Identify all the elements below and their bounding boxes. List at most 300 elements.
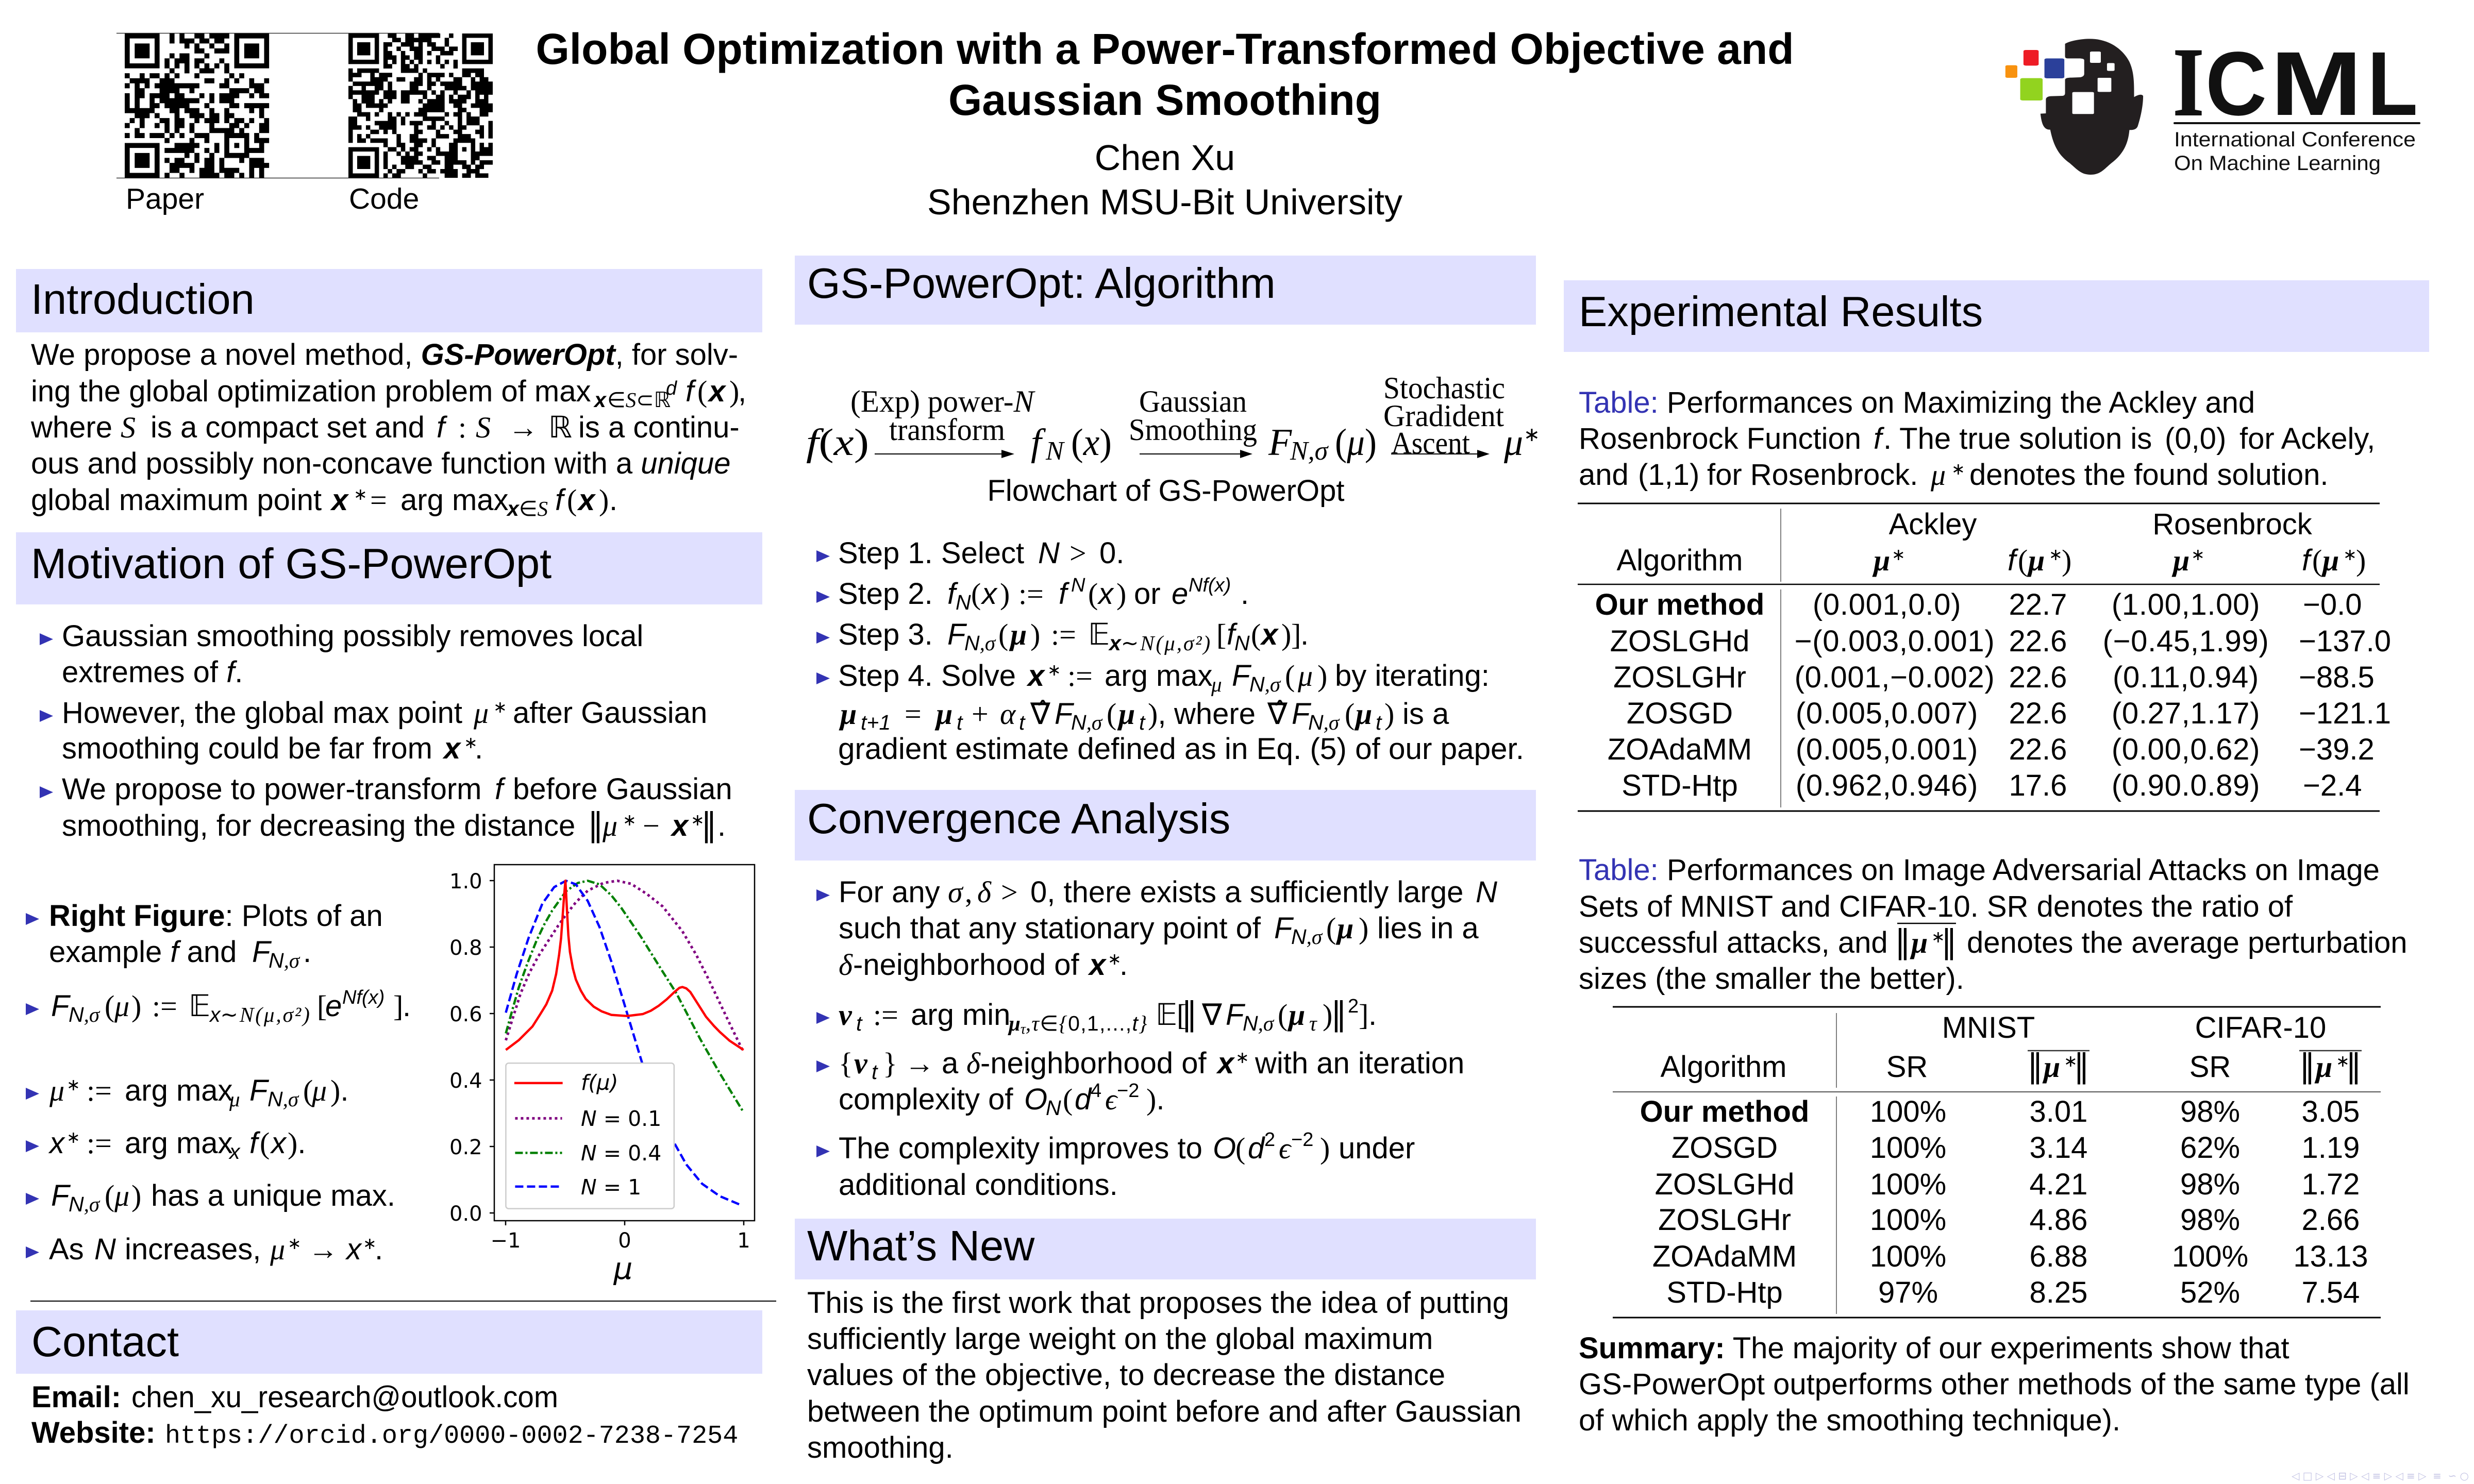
logo tagline: International Conference <box>2174 128 2416 151</box>
flowchart: N <box>1045 436 1065 466</box>
bullet list: motivation points: after Gaussian <box>513 696 707 730</box>
bullet list: right figure notes: . <box>303 935 311 969</box>
table 2: MNIST and CIFAR-10: ZOSGD <box>1671 1131 1778 1165</box>
caption: table 2: denotes the average perturbation <box>1967 926 2408 959</box>
bullet list: convergence results: For any <box>839 875 940 909</box>
table 2: MNIST and CIFAR-10: ‖ <box>2027 1047 2043 1085</box>
bullet list: right figure notes: f <box>249 1126 261 1160</box>
bullet list: algorithm steps: F <box>1055 697 1075 731</box>
text block: summary: of which apply the smoothing technique). <box>1579 1404 2120 1437</box>
bullet list: convergence results: O <box>1213 1132 1236 1165</box>
table 2: MNIST and CIFAR-10: SR <box>2189 1050 2231 1084</box>
bullet list: convergence results: ϵ <box>1279 1132 1292 1165</box>
bullet list: algorithm steps: Step 3. <box>838 618 933 651</box>
bullet list: algorithm steps: μ <box>1211 672 1222 696</box>
table 2: MNIST and CIFAR-10: 97% <box>1878 1276 1938 1309</box>
flowchart: Smoothing <box>1129 413 1257 447</box>
flowchart: ∗ <box>1524 423 1540 446</box>
legend labels <box>581 1070 661 1200</box>
bullet list: algorithm steps: . <box>1300 618 1309 651</box>
heading: Experimental Results <box>1564 280 2429 352</box>
bullet list: right figure notes: increases, <box>125 1233 261 1266</box>
bullet list: algorithm steps: ,σ <box>1265 672 1281 696</box>
heading: Motivation: Motivation of GS-PowerOpt <box>31 539 551 587</box>
table 1: Ackley and Rosenbrock: μ <box>1872 544 1890 577</box>
heading: Contact <box>16 1310 762 1374</box>
bullet list: motivation points <box>40 619 732 844</box>
bullet list: algorithm steps: F <box>947 618 967 651</box>
y axis labels: 1.0 <box>449 870 482 893</box>
text block: introduction body: S <box>121 411 136 444</box>
panel: experimental results <box>1564 280 2429 1437</box>
table 1: Ackley and Rosenbrock: −121.1 <box>2299 697 2391 730</box>
bullet list: algorithm steps: t+1 <box>861 711 891 734</box>
table 1: Ackley and Rosenbrock: −2.4 <box>2303 769 2362 802</box>
caption: table 1: ∗ <box>1951 459 1965 479</box>
bullet list: convergence results: d <box>1248 1132 1265 1165</box>
table 2: MNIST and CIFAR-10: 100% <box>1870 1095 1946 1128</box>
caption: table 1 <box>1579 386 2375 492</box>
bullet list: convergence results: F <box>1274 912 1294 945</box>
bullet list: right figure notes: . <box>340 1074 348 1107</box>
table 1: Ackley and Rosenbrock: f <box>2008 544 2019 577</box>
bullet list: convergence results: ϵ <box>1105 1083 1118 1116</box>
x axis labels: −1 <box>491 1229 521 1253</box>
table 1: Ackley and Rosenbrock: 17.6 <box>2009 769 2067 802</box>
table 2: MNIST and CIFAR-10: μ <box>2042 1050 2060 1084</box>
icon: head with coloured pixels <box>2005 39 2143 175</box>
caption: table 1: f <box>1874 422 1885 456</box>
bullet list: convergence results: a <box>942 1047 959 1080</box>
bullet list: convergence results: := <box>873 998 898 1032</box>
table 1: Ackley and Rosenbrock: ∗ <box>2191 545 2205 564</box>
authors and affiliation <box>927 138 1402 222</box>
bullet list: right figure notes: ( <box>260 1126 270 1160</box>
table 1: Ackley and Rosenbrock: 22.6 <box>2009 625 2067 658</box>
logo: ICML <box>2005 28 2420 175</box>
bullet list: convergence results: complexity of <box>839 1083 1013 1116</box>
text block: introduction body: We propose a novel method, GS-PowerOpt, for solv- <box>31 338 738 372</box>
bullet list: right figure notes: μ <box>114 989 129 1023</box>
bullet list: algorithm steps: where <box>1174 697 1256 731</box>
text block: introduction body: ous and possibly non-concave function with a unique <box>31 447 730 480</box>
flowchart: Stochastic <box>1383 371 1505 405</box>
navigation symbols: ◁ □ ▷ ◁ ⊟ ▷ ◁ ≡ ▷ ◁ ≡ ▷ ≡ ∽ ○ <box>2291 1470 2469 1482</box>
bullet list: algorithm steps: ,σ <box>1324 711 1340 734</box>
bullet list: algorithm steps: μ <box>1117 697 1135 731</box>
bullet list: algorithm steps: t <box>1376 711 1382 734</box>
caption: table 1: denotes the found solution. <box>1969 458 2329 492</box>
bullet list: right figure notes: F <box>51 989 69 1023</box>
bullet list: right figure notes: [ <box>317 989 327 1023</box>
label: Code: Code <box>349 182 419 215</box>
bullet list: algorithm steps: := <box>1018 577 1044 611</box>
bullet list: convergence results: . <box>1156 1083 1164 1116</box>
table 2: MNIST and CIFAR-10: 100% <box>1870 1203 1946 1237</box>
bullet list: right figure notes: ) <box>131 989 141 1023</box>
bullet list: algorithm steps: Nf(x) <box>1189 575 1231 596</box>
bullet list: motivation points: smoothing, for decreasing the distance <box>62 809 575 842</box>
bullet list: convergence results: . <box>1368 998 1377 1032</box>
bullet list: right figure notes <box>26 899 411 1266</box>
bullet list: right figure notes: x <box>345 1233 362 1266</box>
bullet list: convergence results: ‖ <box>1181 995 1197 1033</box>
bullet list: convergence results: ‖ <box>1331 995 1347 1033</box>
bullet list: right figure notes: ( <box>303 1074 313 1107</box>
bullet list: motivation points: ∗ <box>691 810 705 830</box>
bullet list: convergence results: ) <box>1323 998 1332 1032</box>
bullet list: convergence results: ∗ <box>1108 949 1122 969</box>
panel: algorithm <box>795 256 1540 766</box>
bullet list: right figure notes: ∗ <box>288 1234 302 1253</box>
heading: GS-PowerOpt Algorithm <box>795 256 1536 325</box>
caption: table 1: μ <box>1930 458 1946 492</box>
bullet list: right figure notes: ,σ <box>84 1192 101 1216</box>
bullet list: algorithm steps: or <box>1134 577 1161 611</box>
table 1: Ackley and Rosenbrock: 22.6 <box>2009 733 2067 766</box>
table 1: Ackley and Rosenbrock: −88.5 <box>2299 661 2375 694</box>
arrow: gaussian smoothing <box>1140 450 1252 458</box>
text block: introduction body: is a compact set and <box>151 411 425 444</box>
bullet list: convergence results: under <box>1339 1132 1415 1165</box>
table 2: MNIST and CIFAR-10: 8.25 <box>2030 1276 2087 1309</box>
table 2: MNIST and CIFAR-10: 98% <box>2180 1095 2240 1128</box>
bullet list: algorithm steps: := <box>1067 659 1093 693</box>
text block: introduction body: ( <box>567 483 577 517</box>
bullet list: algorithm steps: e <box>1172 577 1188 611</box>
heading: What's New <box>795 1219 1536 1279</box>
bullet list: right figure notes: μ <box>270 1233 285 1266</box>
bullet list: algorithm steps: ,σ <box>980 631 996 655</box>
bullet list: convergence results: x <box>1216 1047 1235 1080</box>
bullet list: algorithm steps: F <box>1292 697 1312 731</box>
bullet list: algorithm steps: μ <box>1354 697 1372 731</box>
bullet list: convergence results: ν <box>854 1047 868 1080</box>
text block: introduction body: = <box>370 483 387 517</box>
heading: Motivation <box>16 532 762 604</box>
bullet list: right figure notes: e <box>325 989 342 1023</box>
bullet list: convergence results: N <box>1476 875 1497 909</box>
table 2: MNIST and CIFAR-10: 100% <box>1870 1168 1946 1201</box>
flowchart: (x) <box>1071 421 1112 464</box>
table 2: MNIST and CIFAR-10: STD-Htp <box>1666 1276 1783 1309</box>
bullet list: convergence results: ) <box>1146 1083 1156 1116</box>
bullet list: convergence results: 𝔼 <box>1156 998 1177 1032</box>
bullet list: right figure notes: Nf(x) <box>342 987 385 1008</box>
arrow: stochastic gradient ascent <box>1391 450 1490 458</box>
bullet list: algorithm steps: ) <box>1030 618 1040 651</box>
bullet list: algorithm steps: N <box>1308 711 1324 734</box>
table 1: Ackley and Rosenbrock: ∗ <box>2049 545 2063 564</box>
bullet list: right figure notes: → <box>308 1233 338 1266</box>
bullet list: algorithm steps: Step 4. Solve <box>838 659 1016 693</box>
text block: introduction body: x <box>707 375 727 408</box>
bullet list: right figure notes: N <box>69 1192 84 1216</box>
table 2: MNIST and CIFAR-10: MNIST <box>1942 1011 2035 1044</box>
panel: introduction <box>16 269 762 520</box>
table 2: MNIST and CIFAR-10: ZOAdaMM <box>1652 1240 1797 1273</box>
bullet list: motivation points: − <box>643 809 660 842</box>
text block: what's new body: values of the objective, to decrease the distance <box>807 1358 1445 1392</box>
text block: introduction body: f <box>686 375 697 408</box>
bullet list: algorithm steps: ( <box>1107 697 1116 731</box>
table 2: MNIST and CIFAR-10: 98% <box>2180 1168 2240 1201</box>
table 1: Ackley and Rosenbrock: −(0.003,0.001) <box>1795 625 1995 658</box>
table 1: Ackley and Rosenbrock: f <box>2302 544 2313 577</box>
bullet list: convergence results: −2 <box>1291 1129 1313 1151</box>
QR code: code <box>348 33 493 178</box>
legend labels: f(μ) <box>581 1070 618 1095</box>
bullet list: algorithm steps: ∇̂ <box>1267 697 1288 731</box>
bullet list: right figure notes: ,σ <box>84 1003 101 1026</box>
table 1: Ackley and Rosenbrock: −39.2 <box>2299 733 2375 766</box>
panel: convergence analysis <box>795 790 1536 1202</box>
caption: table 2 <box>1579 853 2408 996</box>
text block: introduction body: x <box>593 388 607 412</box>
bullet list: convergence results: 2 <box>1348 996 1359 1017</box>
bullet list: right figure notes: ) <box>288 1126 297 1160</box>
text block: introduction body: . <box>609 483 617 517</box>
bullet list: algorithm steps: arg max <box>1105 659 1213 693</box>
legend labels: N = 0.1 <box>581 1106 661 1131</box>
text block: introduction body: d <box>666 378 678 399</box>
bullet list: algorithm steps: + <box>972 697 989 731</box>
table 1: Ackley and Rosenbrock: (0.962,0.946) <box>1796 769 1978 802</box>
bullet list: right figure notes: μ <box>229 1087 240 1111</box>
table 1: Ackley and Rosenbrock: Ackley <box>1889 508 1977 541</box>
table 1: Ackley and Rosenbrock: Algorithm <box>1617 544 1743 577</box>
bullet list: convergence results: N <box>1046 1096 1061 1120</box>
line chart: f and F_N,sigma curves <box>449 865 755 1286</box>
table 2: MNIST and CIFAR-10: ZOSLGHr <box>1658 1203 1791 1237</box>
bullet list: right figure notes: . <box>297 1126 306 1160</box>
table 1: Ackley and Rosenbrock: (0.11,0.94) <box>2113 661 2259 694</box>
table 1: Ackley and Rosenbrock: 22.7 <box>2009 588 2067 621</box>
bullet list: algorithm steps: x <box>1097 577 1114 611</box>
table 2: MNIST and CIFAR-10: 98% <box>2180 1203 2240 1237</box>
bullet list: algorithm steps: x <box>1260 618 1279 651</box>
bullet list: right figure notes: ) <box>330 1074 340 1107</box>
table 2: MNIST and CIFAR-10: CIFAR-10 <box>2195 1011 2326 1044</box>
bullet list: right figure notes: ∗ <box>363 1234 377 1253</box>
bullet list: right figure notes: F <box>51 1179 71 1212</box>
bullet list: algorithm steps: α <box>1000 697 1016 731</box>
bullet list: right figure notes: := <box>87 1074 112 1107</box>
bullet list: right figure notes: ] <box>393 989 403 1023</box>
table 2: MNIST and CIFAR-10: ‖ <box>2074 1047 2089 1085</box>
bullet list: right figure notes: ( <box>105 989 114 1023</box>
table 1: Ackley and Rosenbrock: (0.90.0.89) <box>2112 769 2260 802</box>
table 2: MNIST and CIFAR-10: 3.01 <box>2030 1095 2087 1128</box>
flowchart: N,σ <box>1290 436 1329 466</box>
table 1: Ackley and Rosenbrock: STD-Htp <box>1622 769 1738 802</box>
bullet list: right figure notes: x <box>228 1140 241 1163</box>
bullet list: algorithm steps: , <box>1158 697 1166 731</box>
bullet list: right figure notes: x <box>270 1126 287 1160</box>
text block: summary: Summary: The majority of our experiments show that <box>1579 1331 2289 1365</box>
bullet list: algorithm steps: t <box>1139 711 1146 734</box>
logo wordmark: L <box>2367 33 2418 134</box>
bullet list: right figure notes: F <box>249 1074 270 1107</box>
bullet list: motivation points: ∗ <box>493 697 507 717</box>
bullet list: motivation points: We propose to power-transform <box>62 772 481 806</box>
x axis labels: 0 <box>618 1229 631 1253</box>
text block: contact details: chen_xu_research@outlook.com <box>131 1380 558 1414</box>
flowchart: f <box>1031 421 1046 464</box>
table 2: MNIST and CIFAR-10: ZOSLGHd <box>1655 1168 1794 1201</box>
table 1: Ackley and Rosenbrock: (0.005,0.001) <box>1796 733 1978 766</box>
y axis labels: 0.8 <box>449 936 482 960</box>
bullet list: convergence results: N <box>1243 1011 1258 1035</box>
logo wordmark: I <box>2173 28 2204 137</box>
bullet list: convergence results: δ <box>839 948 853 982</box>
text block: summary: GS-PowerOpt outperforms other methods of the same type (all <box>1579 1368 2410 1401</box>
bullet list: convergence results: ,σ <box>1258 1011 1275 1035</box>
table 2: MNIST and CIFAR-10: Algorithm <box>1661 1050 1786 1084</box>
table 1: Ackley and Rosenbrock: Our method <box>1595 588 1764 621</box>
bullet list: right figure notes: As <box>49 1233 84 1266</box>
bullet list: motivation points: extremes of f. <box>62 655 243 689</box>
table 2: MNIST and CIFAR-10: SR <box>1886 1050 1928 1084</box>
text block: introduction body: S <box>476 411 491 444</box>
y axis labels: 0.2 <box>449 1136 482 1159</box>
heading: GS-PowerOpt Algorithm: GS-PowerOpt: Algorithm <box>807 259 1276 307</box>
bullet list: convergence results: > <box>1001 875 1018 909</box>
bullet list: convergence results: −2 <box>1117 1080 1139 1102</box>
flowchart: Gradident <box>1383 399 1504 433</box>
caption: table 2: ‖ <box>1941 923 1957 961</box>
bullet list: convergence results: ( <box>1278 998 1288 1032</box>
table 2: MNIST and CIFAR-10 <box>1613 1007 2381 1318</box>
bullet list: algorithm steps: N <box>1038 536 1060 570</box>
bullet list: algorithm steps: N <box>956 591 971 614</box>
text block: introduction body: , <box>738 375 746 408</box>
table 2: MNIST and CIFAR-10: 1.72 <box>2302 1168 2360 1201</box>
bullet list: convergence results: -neighborhood of <box>980 1047 1207 1080</box>
caption: flowchart: Flowchart of GS-PowerOpt <box>988 474 1344 508</box>
bullet list: algorithm steps: ( <box>1251 618 1261 651</box>
bullet list: algorithm steps: t <box>957 711 963 734</box>
table 1: Ackley and Rosenbrock: (0.27,1.17) <box>2112 697 2260 730</box>
bullet list: convergence results: additional conditions. <box>839 1168 1118 1202</box>
bullet list: algorithm steps: ) <box>1281 618 1291 651</box>
bullet list: motivation points: μ <box>602 809 617 842</box>
bullet list: algorithm steps: ) <box>1000 577 1010 611</box>
bullet list: convergence results: ) <box>1359 912 1368 945</box>
bullet list: motivation points: f <box>495 772 506 806</box>
bullet list: algorithm steps: x <box>980 577 998 611</box>
y axis labels: 0.4 <box>449 1069 482 1093</box>
bullet list: convergence results: μ <box>1335 912 1353 945</box>
bullet list: algorithm steps <box>816 536 1524 766</box>
bullet list: convergence results: ( <box>1063 1083 1073 1116</box>
bullet list: motivation points: ‖ <box>588 806 604 844</box>
table 1: Ackley and Rosenbrock: (0.005,0.007) <box>1796 697 1978 730</box>
bullet list: convergence results: ν <box>839 998 852 1032</box>
table 1: Ackley and Rosenbrock: μ <box>2027 544 2045 577</box>
table 2: MNIST and CIFAR-10: 100% <box>2172 1240 2248 1273</box>
legend labels: N = 1 <box>581 1175 641 1200</box>
bullet list: algorithm steps: N <box>1071 711 1086 734</box>
bullet list: convergence results: ∇ <box>1201 998 1222 1032</box>
bullet list: convergence results: 0, there exists a sufficiently large <box>1030 875 1463 909</box>
table 2: MNIST and CIFAR-10: 2.66 <box>2302 1203 2360 1237</box>
bullet list: algorithm steps: f <box>1227 618 1238 651</box>
table 2: MNIST and CIFAR-10: 6.88 <box>2030 1240 2087 1273</box>
bullet list: motivation points: μ <box>473 696 489 730</box>
bullet list: convergence results: The complexity improves to <box>839 1132 1202 1165</box>
bullet list: algorithm steps: = <box>905 697 922 731</box>
bullet list: algorithm steps: f <box>1059 577 1070 611</box>
bullet list: motivation points: . <box>475 732 483 765</box>
text block: introduction body: where <box>31 411 112 444</box>
bullet list: algorithm steps: ∇̂ <box>1030 697 1050 731</box>
bullet list: algorithm steps: μ <box>934 697 952 731</box>
arrow: power transform <box>875 450 1014 458</box>
bullet list: motivation points: However, the global max point <box>62 696 462 730</box>
table 1: Ackley and Rosenbrock: ) <box>2062 544 2071 577</box>
caption: table 1: for Rosenbrock. <box>1707 458 1918 492</box>
table 1: Ackley and Rosenbrock: (−0.45,1.99) <box>2103 625 2269 658</box>
bullet list: algorithm steps: ) <box>1148 697 1158 731</box>
bullet list: algorithm steps: 𝔼 <box>1088 618 1110 651</box>
bullet list: right figure notes: μ <box>311 1074 327 1107</box>
logo tagline <box>2174 128 2416 175</box>
bullet list: convergence results: ( <box>1235 1132 1245 1165</box>
caption: table 1: and <box>1579 458 1629 492</box>
bullet list: algorithm steps: ) <box>1317 659 1327 693</box>
bullet list: algorithm steps: ) <box>1384 697 1394 731</box>
heading: Contact: Contact <box>31 1318 179 1365</box>
bullet list: right figure notes: F <box>252 935 272 969</box>
title: Gaussian Smoothing <box>948 76 1381 124</box>
bullet list: algorithm steps: ) <box>1116 577 1126 611</box>
table 2: MNIST and CIFAR-10: 13.13 <box>2293 1240 2368 1273</box>
text block: introduction body: ( <box>697 375 707 408</box>
text block: contact details: Website: <box>31 1416 156 1449</box>
caption: table 2: successful attacks, and <box>1579 926 1888 959</box>
caption: table 1: (1,1) <box>1638 458 1699 492</box>
bullet list: convergence results: μ <box>1008 1011 1021 1035</box>
table 1: Ackley and Rosenbrock: ZOSLGHd <box>1610 625 1749 658</box>
authors and affiliation: Shenzhen MSU-Bit University <box>927 182 1402 222</box>
table 1: Ackley and Rosenbrock: ( <box>2018 544 2028 577</box>
text block: introduction body: ℝ <box>548 411 572 444</box>
bullet list: convergence results: d <box>1075 1083 1092 1116</box>
text block: what's new body: between the optimum point before and after Gaussian <box>807 1395 1522 1428</box>
text block: introduction body: f <box>555 483 566 517</box>
bullet list: convergence results: 0,1,...,t} <box>1068 1011 1147 1035</box>
table 1: Ackley and Rosenbrock: μ <box>2321 544 2339 577</box>
y axis labels <box>449 870 482 1226</box>
text block: introduction body: f <box>437 411 448 444</box>
table 1: Ackley and Rosenbrock: −0.0 <box>2303 588 2362 621</box>
chart curves <box>506 881 744 1209</box>
table 1: Ackley and Rosenbrock: (0.001,0.0) <box>1813 588 1961 621</box>
text block: what's new body: sufficiently large weight on the global maximum <box>807 1322 1433 1356</box>
text block: introduction body: x <box>577 483 596 517</box>
logo wordmark <box>2173 28 2418 137</box>
bullet list: algorithm steps: N <box>1249 672 1265 696</box>
bullet list: convergence results: x <box>1088 948 1107 982</box>
caption: table 1: for Ackely, <box>2239 422 2375 456</box>
text block: what's new body: smoothing. <box>807 1431 954 1464</box>
text block: introduction body: arg max <box>400 483 509 517</box>
bullet list: right figure notes: N <box>69 1003 84 1026</box>
flowchart <box>806 371 1540 466</box>
table 1: Ackley and Rosenbrock: (0.00,0.62) <box>2112 733 2260 766</box>
table 2: MNIST and CIFAR-10: 3.05 <box>2302 1095 2360 1128</box>
